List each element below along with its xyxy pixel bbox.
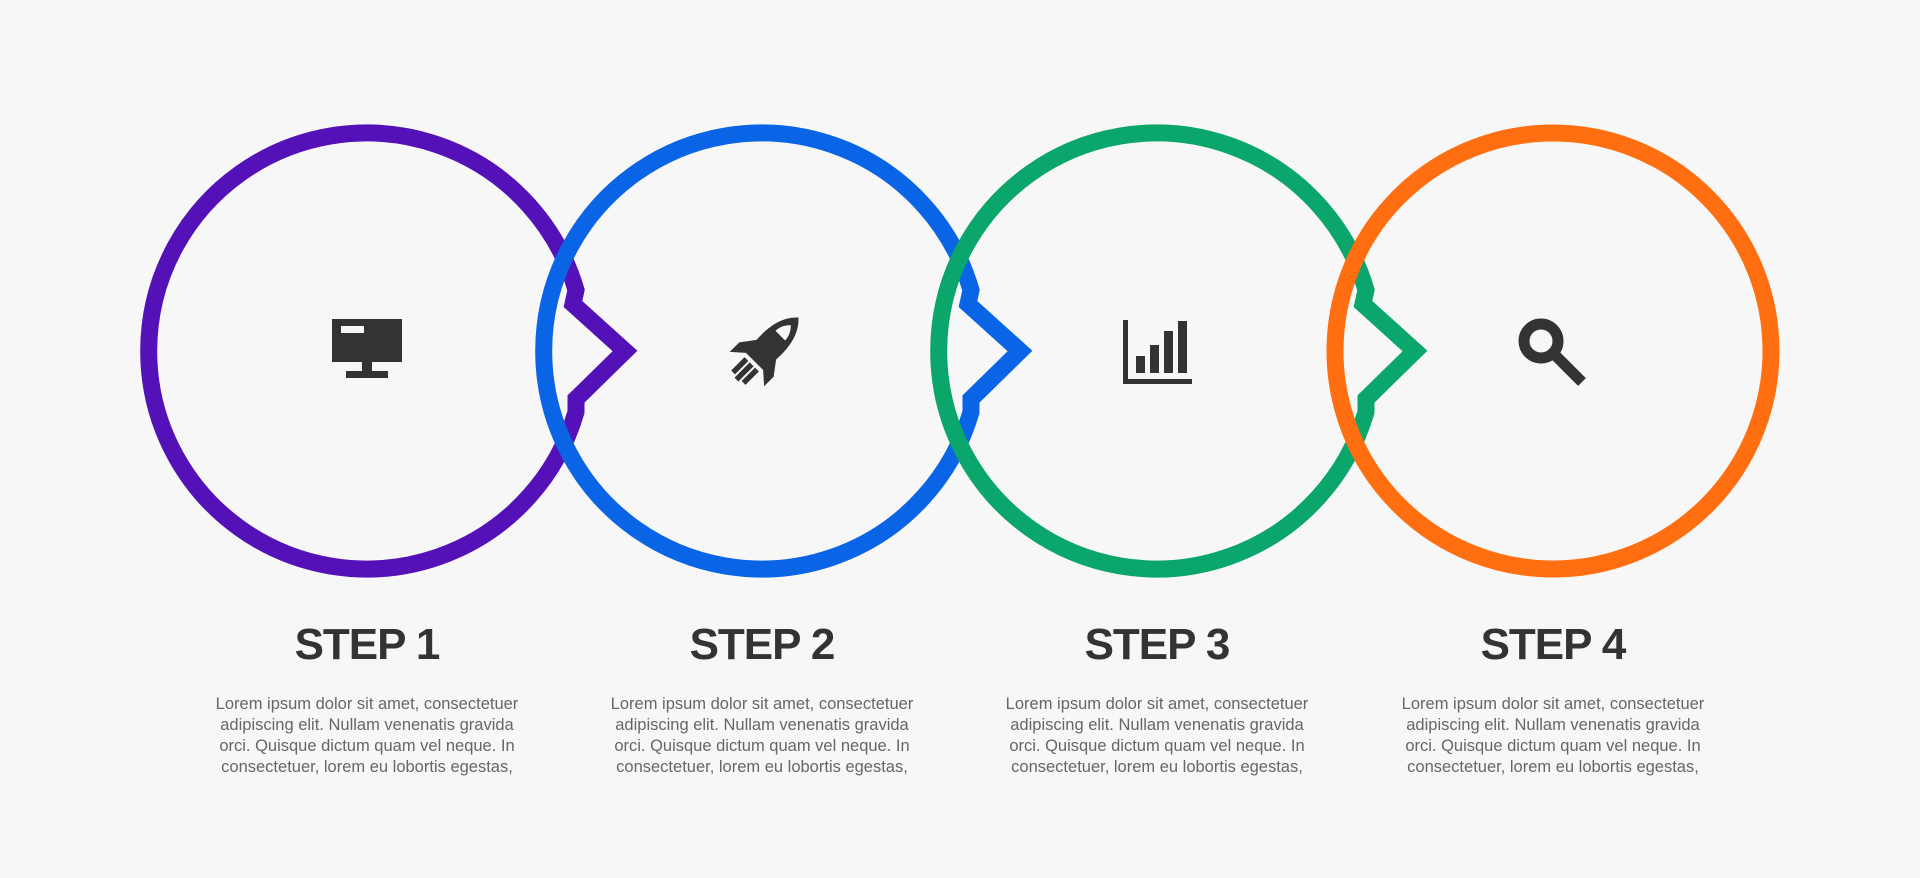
circle: step 3 <box>939 133 1415 569</box>
step 1 text: Lorem ipsum dolor sit amet, consectetuer <box>216 695 518 713</box>
step 1 text <box>216 620 518 776</box>
step 2 text: adipiscing elit. Nullam venenatis gravida <box>615 716 909 734</box>
step 4 text: adipiscing elit. Nullam venenatis gravida <box>1406 716 1700 734</box>
step 1 text: STEP 1 <box>295 620 439 669</box>
step 4 text: orci. Quisque dictum quam vel neque. In <box>1405 737 1701 755</box>
icon: bar chart <box>1123 320 1192 384</box>
circle: step 1 <box>149 133 625 569</box>
step 2 text: STEP 2 <box>690 620 834 669</box>
step 4 text: STEP 4 <box>1481 620 1625 669</box>
step 2 text: consectetuer, lorem eu lobortis egestas, <box>616 758 908 776</box>
step 3 text: orci. Quisque dictum quam vel neque. In <box>1009 737 1305 755</box>
step 2 text: orci. Quisque dictum quam vel neque. In <box>614 737 910 755</box>
step 2 text <box>611 620 913 776</box>
step 3 text: STEP 3 <box>1085 620 1229 669</box>
circle: step 2 <box>544 133 1020 569</box>
step 2 text: Lorem ipsum dolor sit amet, consectetuer <box>611 695 913 713</box>
step 3 text: adipiscing elit. Nullam venenatis gravida <box>1010 716 1304 734</box>
step 4 text: consectetuer, lorem eu lobortis egestas, <box>1407 758 1699 776</box>
icon: monitor <box>332 319 402 378</box>
step 3 text: consectetuer, lorem eu lobortis egestas, <box>1011 758 1303 776</box>
step 1 text: orci. Quisque dictum quam vel neque. In <box>219 737 515 755</box>
circle: step 4 <box>1335 133 1771 569</box>
step 3 text: Lorem ipsum dolor sit amet, consectetuer <box>1006 695 1308 713</box>
step 1 text: consectetuer, lorem eu lobortis egestas, <box>221 758 513 776</box>
step 4 text <box>1402 620 1704 776</box>
icon: rocket <box>719 300 816 397</box>
icon: magnifier <box>1524 324 1582 382</box>
step 3 text <box>1006 620 1308 776</box>
step 1 text: adipiscing elit. Nullam venenatis gravida <box>220 716 514 734</box>
step 4 text: Lorem ipsum dolor sit amet, consectetuer <box>1402 695 1704 713</box>
